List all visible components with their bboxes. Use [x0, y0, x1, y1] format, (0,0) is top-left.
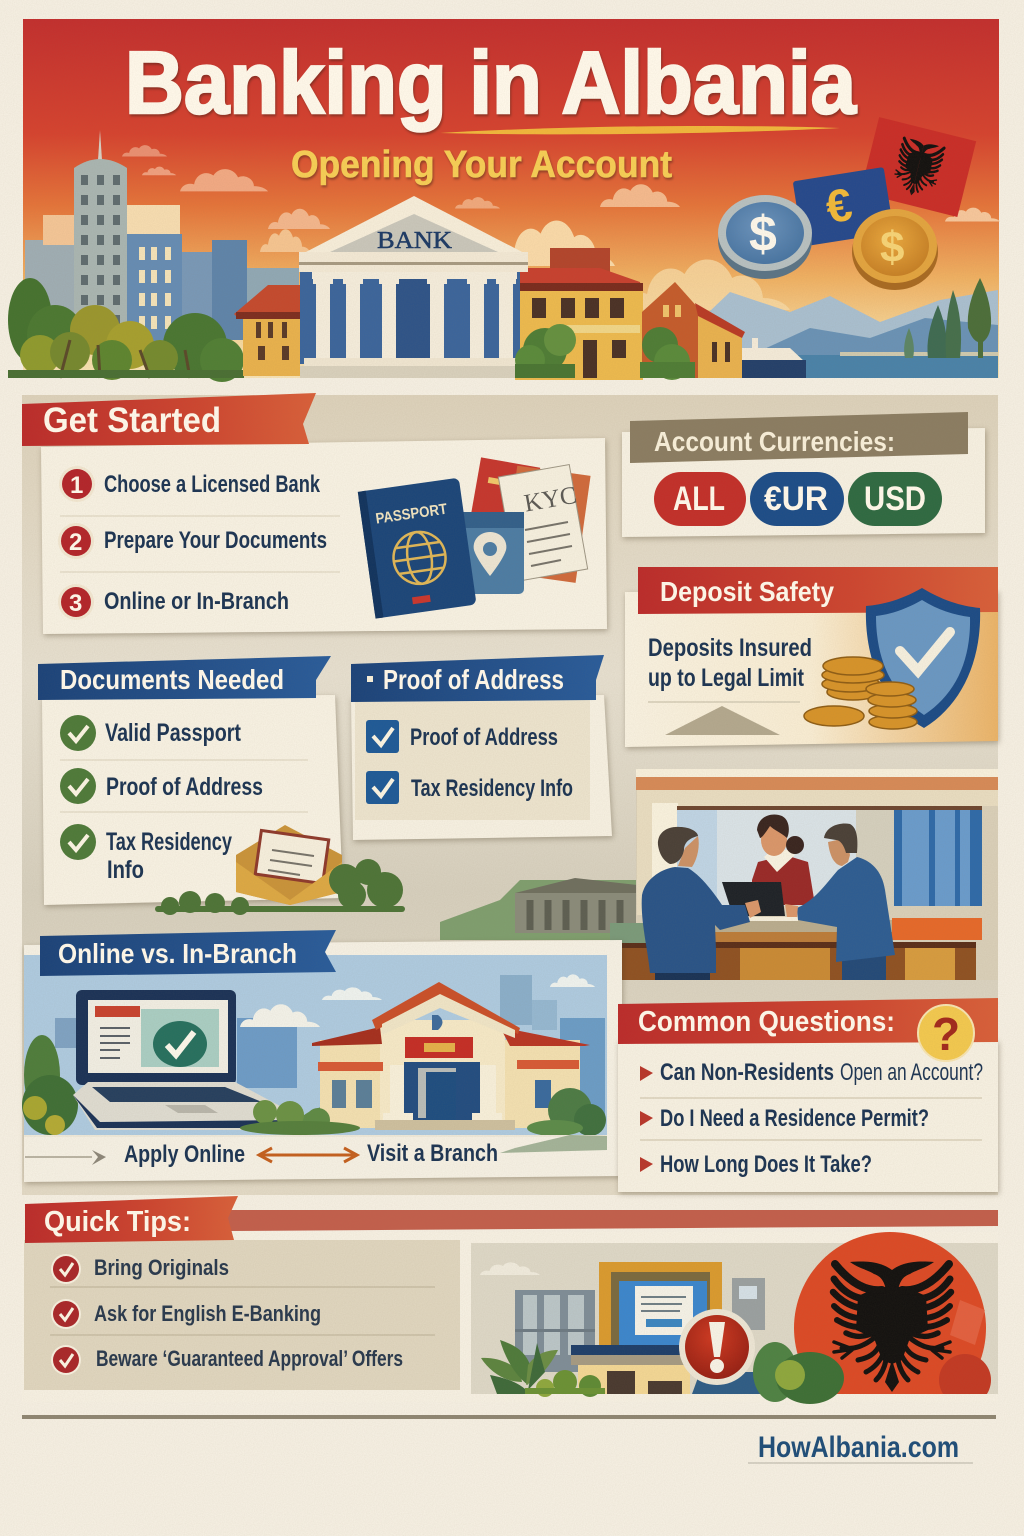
footer divider [22, 1415, 996, 1419]
item tax residency: Tax Residency [106, 828, 232, 856]
step 2 [58, 523, 327, 559]
yellow building [515, 248, 643, 380]
question 1: Can Non-Residents [660, 1059, 834, 1086]
route: apply online to visit a branch [25, 1135, 607, 1168]
panel: online vs in-branch [22, 930, 622, 1182]
step 3: 3 [69, 590, 82, 617]
panel: warning scene [471, 1232, 998, 1404]
left trees [8, 278, 244, 382]
step 2: Prepare Your Documents [104, 527, 327, 554]
title: Banking in Albania [125, 33, 857, 132]
tip 3 [51, 1345, 403, 1375]
deposit banner [638, 567, 998, 614]
deposit text: Deposits Insured [648, 634, 812, 662]
proof card [351, 695, 612, 840]
panel: common questions [618, 998, 998, 1192]
ship [742, 338, 806, 378]
deposit card [625, 590, 998, 747]
step 2: 2 [69, 529, 82, 556]
euro note: € [822, 178, 856, 233]
icon: question mark: ? [932, 1008, 960, 1060]
icon: question mark [918, 1005, 974, 1061]
tip 1 [51, 1254, 229, 1284]
icon: coin stacks [804, 657, 917, 729]
panel: proof of address [351, 655, 612, 840]
header panel [8, 19, 1000, 382]
counter [610, 917, 982, 980]
online heading banner [40, 930, 336, 976]
tips banner [25, 1196, 238, 1243]
get started card [41, 438, 607, 634]
checkbox tax residency [366, 771, 573, 804]
panel: get started [22, 393, 607, 634]
step 3: Online or In-Branch [104, 588, 289, 615]
documents card [42, 695, 343, 905]
background hill with bushes [155, 825, 640, 940]
get started banner [22, 393, 316, 446]
dollar coin blue [718, 195, 812, 279]
tip 1: Bring Originals [94, 1255, 229, 1280]
tip 2: Ask for English E-Banking [94, 1301, 321, 1326]
orange houses right [642, 282, 745, 378]
pill USD [848, 472, 942, 526]
online heading: Online vs. In-Branch [58, 938, 297, 969]
dollar coin gold [852, 209, 938, 290]
bushes [155, 859, 405, 915]
header sky [23, 19, 999, 378]
icon: passport [358, 478, 477, 619]
item tax residency: Info [107, 856, 144, 884]
branch building [298, 982, 590, 1130]
tips card [24, 1240, 460, 1390]
scene frame [636, 769, 998, 980]
background skyline [55, 974, 605, 1118]
icon: KYC papers and tickets: KYC [522, 482, 579, 518]
get started heading: Get Started [43, 401, 221, 440]
euro note [793, 167, 894, 247]
tips heading: Quick Tips: [44, 1206, 191, 1238]
currency notes and coins [718, 117, 976, 290]
icon: location card [462, 512, 524, 594]
currencies heading: Account Currencies: [654, 426, 895, 457]
panel: documents needed [38, 656, 343, 905]
Albanian flag [860, 117, 976, 217]
currencies banner [630, 412, 968, 463]
tablet [722, 882, 785, 916]
checkbox proof of address: Proof of Address [410, 724, 558, 751]
route: apply online to visit a branch: Apply Online [124, 1141, 245, 1168]
item proof of address [60, 768, 263, 804]
envelope icon [236, 825, 342, 905]
question 1 [640, 1059, 983, 1086]
scene background [471, 1243, 998, 1394]
bank building [299, 196, 528, 378]
item proof of address: Proof of Address [106, 773, 263, 801]
step 1: Choose a Licensed Bank [104, 471, 320, 498]
leafy plant [481, 1340, 605, 1397]
left orange house [234, 285, 300, 376]
Albanian emblem circle [794, 1232, 991, 1394]
questions card [618, 1040, 998, 1192]
footer site name: HowAlbania.com [758, 1431, 959, 1464]
checkbox tax residency: Tax Residency Info [411, 775, 573, 802]
currencies card [622, 428, 985, 537]
pill EUR [750, 472, 844, 526]
step 1: 1 [70, 472, 83, 499]
sky clouds [122, 145, 1000, 310]
bank side trees [515, 324, 695, 380]
questions banner [618, 998, 998, 1044]
tips strip [228, 1210, 998, 1231]
pill ALL [654, 472, 746, 526]
proof heading: Proof of Address [383, 664, 564, 695]
left bushes [22, 1035, 78, 1135]
window view [677, 806, 895, 906]
item tax residency [60, 824, 232, 884]
pill EUR: €UR [764, 480, 828, 518]
documents banner [38, 656, 331, 700]
deposit heading: Deposit Safety [660, 576, 834, 607]
question 3: How Long Does It Take? [660, 1151, 872, 1178]
warning badge [679, 1309, 755, 1385]
city buildings [25, 130, 299, 344]
curtain [894, 810, 982, 906]
online card [24, 940, 622, 1182]
checkbox proof of address [366, 720, 558, 753]
panel: account currencies [622, 412, 985, 537]
title underline [440, 126, 840, 134]
route: apply online to visit a branch: Visit a Branch [367, 1140, 498, 1167]
woman teller [752, 815, 815, 905]
bank sign: BANK [377, 228, 453, 254]
cypress trees [904, 278, 991, 358]
distant mountains and water [690, 290, 998, 378]
dollar coin gold: $ [880, 223, 904, 272]
panel: teller scene [610, 769, 998, 980]
step 3 [58, 584, 289, 620]
panel: deposit safety [625, 567, 998, 747]
item valid passport: Valid Passport [105, 719, 242, 747]
icon: shield [866, 588, 980, 728]
pill ALL: ALL [673, 480, 725, 518]
tip 2 [51, 1299, 321, 1329]
icon: passport: PASSPORT [375, 501, 448, 528]
laptop icon [73, 990, 297, 1130]
online illustration sky [24, 955, 607, 1135]
middle section background [22, 395, 998, 1195]
panel: deposit safety: up to Legal Limit [648, 664, 805, 692]
item valid passport [60, 715, 242, 751]
question 2: Do I Need a Residence Permit? [660, 1105, 929, 1132]
right customer [785, 824, 895, 980]
pill USD: USD [864, 480, 926, 518]
low building [571, 1345, 691, 1394]
foreground bushes [240, 1088, 606, 1136]
left customer [642, 827, 761, 980]
questions heading: Common Questions: [638, 1006, 895, 1038]
bushes [692, 1342, 844, 1404]
dollar coin blue: $ [749, 206, 777, 262]
icon: KYC papers and tickets [467, 457, 591, 583]
proof banner [351, 655, 604, 702]
subtitle: Opening Your Account [291, 144, 672, 186]
grey building [515, 1290, 595, 1372]
monitor [599, 1262, 722, 1346]
panel: quick tips [22, 1196, 998, 1402]
tip 3: Beware ‘Guaranteed Approval’ Offers [96, 1346, 403, 1371]
documents heading: Documents Needed [60, 664, 284, 695]
small grey box [732, 1278, 765, 1330]
step 1 [59, 466, 320, 502]
